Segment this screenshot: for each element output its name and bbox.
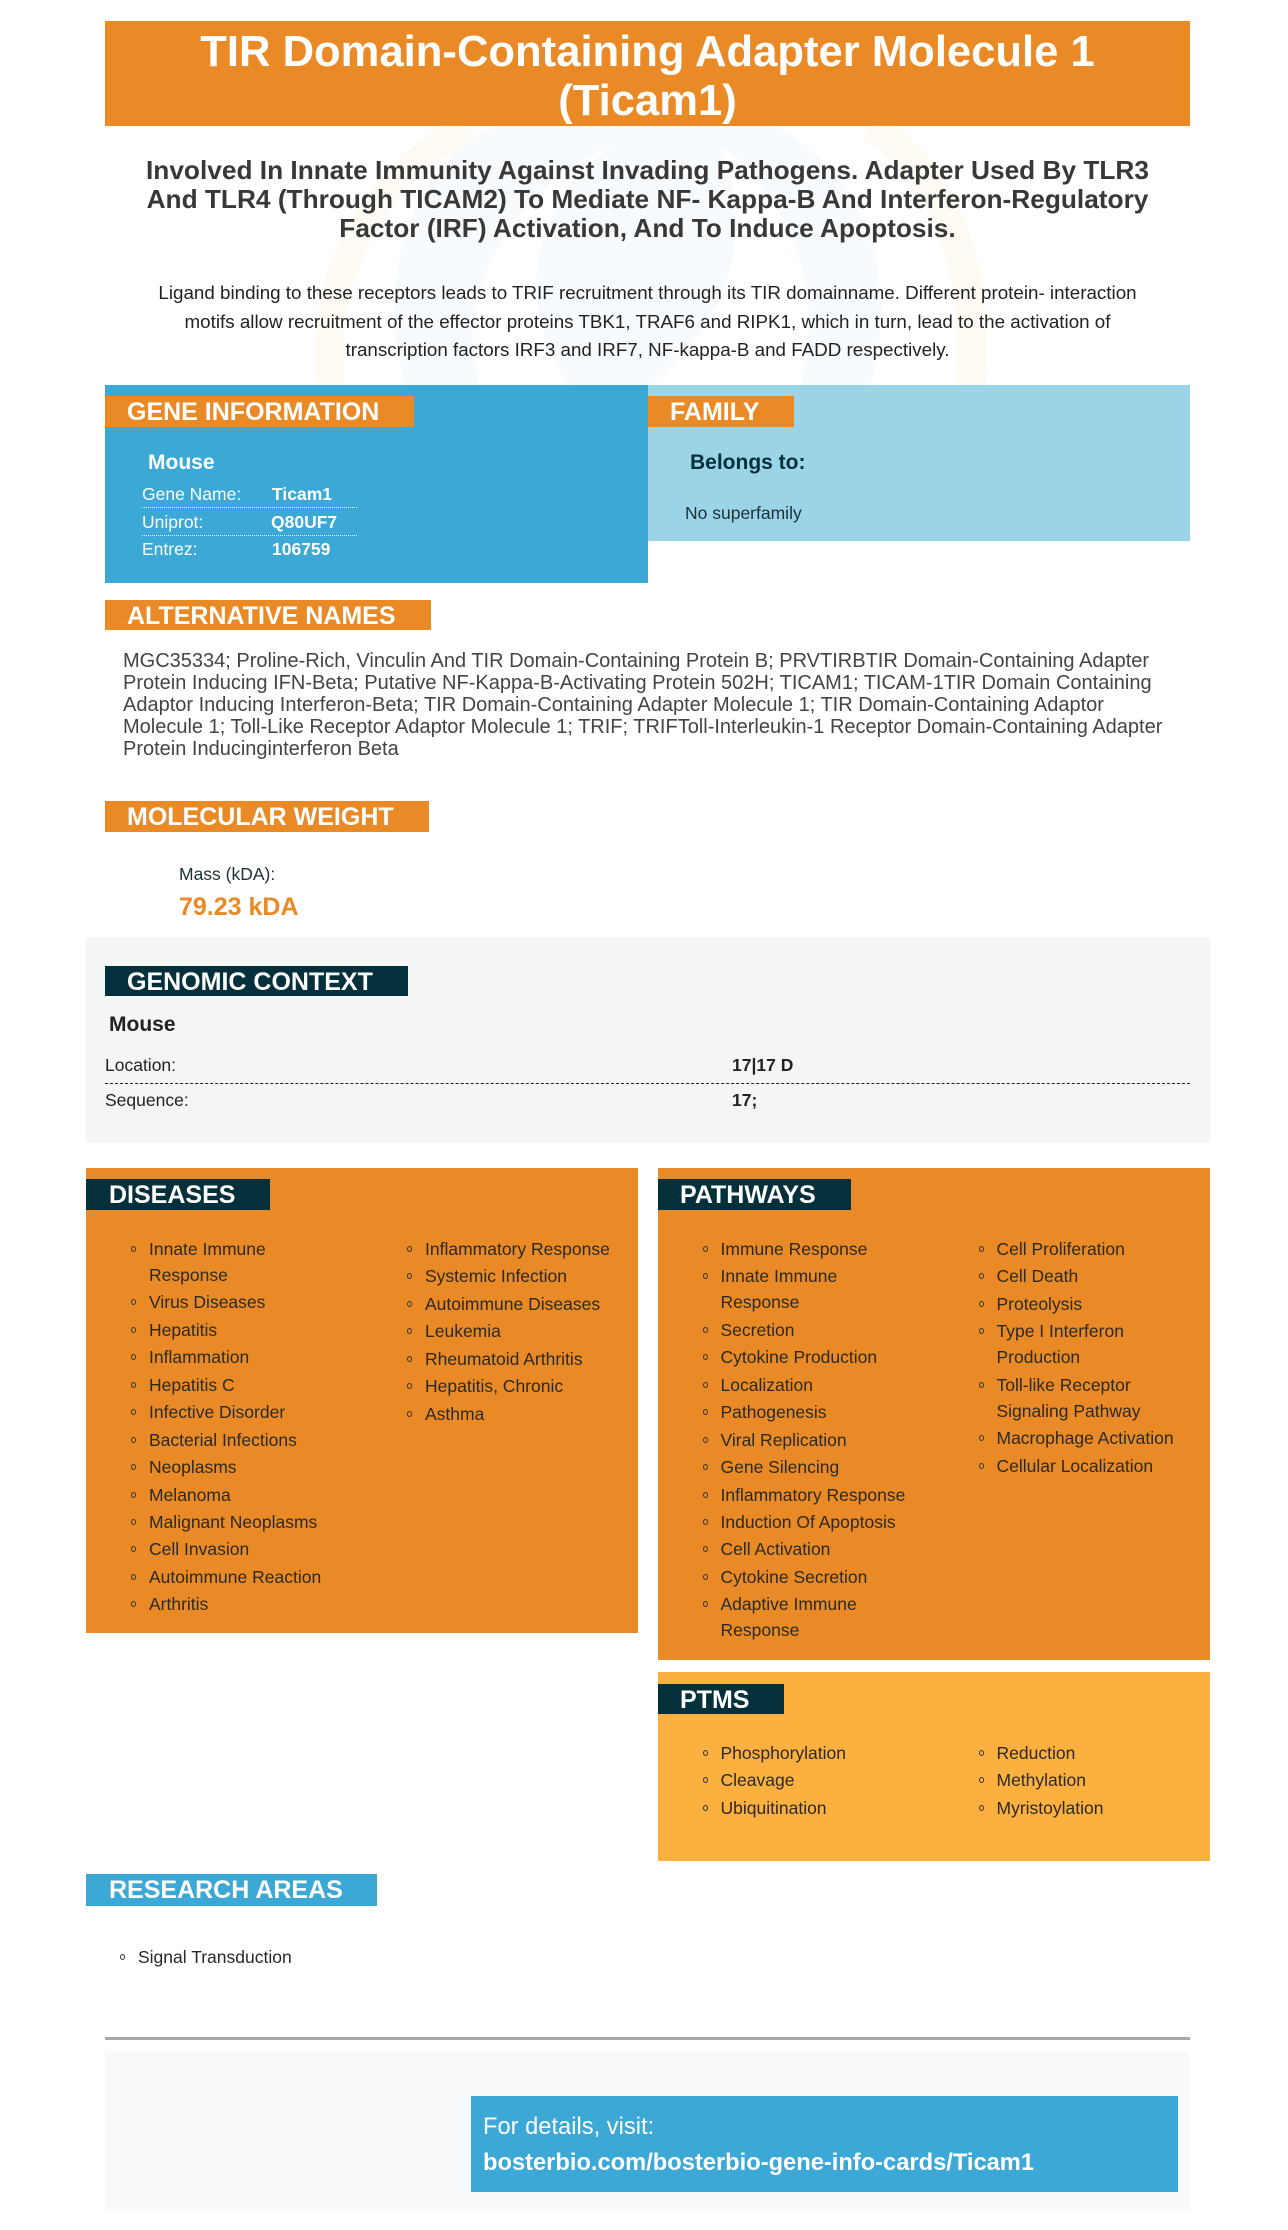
- location row: [105, 1055, 793, 1075]
- diseases list column 2: Rheumatoid Arthritis: [425, 1349, 583, 1369]
- pathways list column 2: [979, 1239, 1174, 1476]
- heading: gene information: GENE INFORMATION: [127, 398, 379, 426]
- heading: family: FAMILY: [670, 398, 759, 426]
- subtitle: And TLR4 (Through TICAM2) To Mediate NF- Kappa-B And Interferon-Regulatory: [147, 184, 1148, 214]
- diseases list column 1: Infective Disorder: [149, 1402, 285, 1422]
- heading: genomic context: GENOMIC CONTEXT: [127, 968, 373, 996]
- ptms list column 1: Ubiquitination: [720, 1798, 827, 1818]
- title banner: [105, 21, 1190, 126]
- pathways list column 1: Response: [720, 1620, 799, 1640]
- description paragraph: transcription factors IRF3 and IRF7, NF-kappa-B and FADD respectively.: [345, 339, 950, 360]
- diseases list column 1: Cell Invasion: [149, 1539, 249, 1559]
- ptms list column 2: Myristoylation: [996, 1798, 1103, 1818]
- panel: genomic context: [86, 937, 1210, 1143]
- pathways list column 1: Immune Response: [720, 1239, 867, 1259]
- alternative names text: Protein Inducinginterferon Beta: [123, 738, 399, 760]
- gene table: Q80UF7: [271, 512, 337, 532]
- alternative names text: Protein Inducing IFN-Beta; Putative NF-Kappa-B-Activating Protein 502H; TICAM1; TICAM-1TIR Domain Containing: [123, 672, 1152, 694]
- pathways list column 1: Secretion: [720, 1320, 794, 1340]
- diseases list column 1: Response: [149, 1265, 228, 1285]
- sequence row: 17;: [732, 1090, 757, 1110]
- description paragraph: motifs allow recruitment of the effector proteins TBK1, TRAF6 and RIPK1, which in turn, lead to the activation of: [185, 311, 1110, 332]
- pathways list column 2: Toll-like Receptor: [996, 1375, 1131, 1395]
- diseases list column 1: Virus Diseases: [149, 1292, 265, 1312]
- sequence row: [105, 1083, 1190, 1116]
- subtitle: Factor (IRF) Activation, And To Induce Apoptosis.: [339, 213, 956, 243]
- alternative names text: Adaptor Inducing Interferon-Beta; TIR Domain-Containing Adapter Molecule 1; TIR Domain-Containing Adaptor: [123, 694, 1104, 716]
- pathways list column 1: Pathogenesis: [720, 1402, 827, 1422]
- subtitle: Involved In Innate Immunity Against Invading Pathogens. Adapter Used By TLR3: [146, 155, 1149, 185]
- pathways list column 2: Cellular Localization: [996, 1456, 1153, 1476]
- species label: Mouse: [109, 1013, 176, 1036]
- heading: ptms: [658, 1684, 784, 1714]
- pathways list column 2: Macrophage Activation: [996, 1428, 1174, 1448]
- superfamily value: No superfamily: [685, 503, 802, 523]
- heading: alternative names: ALTERNATIVE NAMES: [127, 602, 396, 630]
- sequence row: Sequence:: [105, 1090, 189, 1110]
- alternative names text: Molecule 1; Toll-Like Receptor Adaptor Molecule 1; TRIF; TRIFToll-Interleukin-1 Receptor Domain-Containing Adapter: [123, 716, 1162, 738]
- gene table: 106759: [272, 539, 330, 559]
- description paragraph: [158, 282, 1137, 360]
- panel: ptms: [658, 1672, 1210, 1861]
- ptms list column 2: [979, 1743, 1103, 1818]
- heading: diseases: [86, 1179, 270, 1210]
- gene table: Uniprot:: [142, 512, 203, 532]
- diseases list column 1: Hepatitis: [149, 1320, 217, 1340]
- pathways list column 1: Inflammatory Response: [720, 1484, 905, 1504]
- pathways list column 1: Cytokine Production: [720, 1347, 877, 1367]
- diseases list column 2: Hepatitis, Chronic: [425, 1376, 563, 1396]
- pathways list column 2: Production: [996, 1347, 1080, 1367]
- description paragraph: Ligand binding to these receptors leads to TRIF recruitment through its TIR domainname. Different protein- interaction: [158, 282, 1137, 303]
- pathways list column 1: Cell Activation: [720, 1539, 830, 1559]
- gene table: [142, 484, 357, 559]
- diseases list column 2: [407, 1239, 610, 1424]
- panel: pathways: [658, 1168, 1210, 1660]
- mass value: 79.23 kDA: [179, 893, 299, 921]
- pathways list column 1: Induction Of Apoptosis: [720, 1512, 896, 1532]
- diseases list column 1: Bacterial Infections: [149, 1430, 297, 1450]
- ptms list column 1: Cleavage: [720, 1770, 794, 1790]
- diseases list column 2: Leukemia: [425, 1321, 501, 1341]
- ptms list column 1: [703, 1743, 846, 1818]
- pathways list column 2: Type I Interferon: [996, 1321, 1124, 1341]
- diseases list column 2: Systemic Infection: [425, 1266, 567, 1286]
- species label: Mouse: [148, 451, 215, 474]
- subtitle: [146, 155, 1149, 243]
- diseases list column 2: Autoimmune Diseases: [425, 1294, 600, 1314]
- callout: details link: bosterbio.com/bosterbio-gene-info-cards/Ticam1: [483, 2150, 1034, 2176]
- panel: gene information: [105, 385, 648, 583]
- title banner: TIR Domain-Containing Adapter Molecule 1: [200, 28, 1095, 76]
- diseases list column 1: Malignant Neoplasms: [149, 1512, 317, 1532]
- diseases list column 1: Hepatitis C: [149, 1375, 235, 1395]
- location row: 17|17 D: [732, 1055, 793, 1075]
- heading: pathways: [658, 1179, 851, 1210]
- heading: molecular weight: MOLECULAR WEIGHT: [127, 803, 394, 831]
- pathways list column 1: Cytokine Secretion: [720, 1567, 867, 1587]
- footer divider: [105, 2037, 1190, 2040]
- pathways list column 1: Localization: [720, 1375, 813, 1395]
- ptms list column 2: Reduction: [996, 1743, 1075, 1763]
- diseases list column 1: Innate Immune: [149, 1239, 266, 1259]
- diseases list column 1: Neoplasms: [149, 1457, 237, 1477]
- pathways list column 1: Innate Immune: [720, 1266, 837, 1286]
- pathways list column 2: Proteolysis: [996, 1294, 1082, 1314]
- ptms list column 2: Methylation: [996, 1770, 1086, 1790]
- pathways list column 1: Gene Silencing: [720, 1457, 839, 1477]
- research areas list: Signal Transduction: [138, 1947, 292, 1967]
- panel: footer: [105, 2052, 1190, 2211]
- pathways list column 1: [703, 1239, 905, 1640]
- panel: diseases: [86, 1168, 638, 1633]
- pathways list column 1: Response: [720, 1292, 799, 1312]
- gene table: Gene Name:: [142, 484, 241, 504]
- alternative names text: MGC35334; Proline-Rich, Vinculin And TIR Domain-Containing Protein B; PRVTIRBTIR Domain-Containing Adapter: [123, 650, 1149, 672]
- callout: details link: [471, 2096, 1178, 2192]
- diseases list column 1: Autoimmune Reaction: [149, 1567, 321, 1587]
- callout: details link: For details, visit:: [483, 2114, 654, 2140]
- diseases list column 1: [131, 1239, 321, 1614]
- diseases list column 2: Asthma: [425, 1404, 484, 1424]
- belongs to label: Belongs to:: [690, 451, 806, 474]
- heading: diseases: DISEASES: [109, 1181, 235, 1209]
- diseases list column 1: Melanoma: [149, 1484, 231, 1504]
- ptms list column 1: Phosphorylation: [720, 1743, 846, 1763]
- pathways list column 1: Adaptive Immune: [720, 1594, 857, 1614]
- pathways list column 2: Cell Proliferation: [996, 1239, 1125, 1259]
- location row: Location:: [105, 1055, 176, 1075]
- pathways list column 2: Signaling Pathway: [996, 1401, 1140, 1421]
- alternative names text: [123, 650, 1162, 760]
- heading: research areas: RESEARCH AREAS: [109, 1876, 343, 1904]
- heading: family: [648, 396, 794, 427]
- pathways list column 1: Viral Replication: [720, 1430, 847, 1450]
- diseases list column 1: Arthritis: [149, 1594, 208, 1614]
- panel: family: [648, 385, 1190, 541]
- pathways list column 2: Cell Death: [996, 1266, 1078, 1286]
- heading: pathways: PATHWAYS: [680, 1181, 816, 1209]
- title banner: (Ticam1): [558, 77, 737, 125]
- gene table: Ticam1: [272, 484, 332, 504]
- heading: ptms: PTMS: [680, 1686, 749, 1714]
- decorative watermark logo: [315, 126, 987, 385]
- mass label: Mass (kDA):: [179, 864, 275, 884]
- gene table: Entrez:: [142, 539, 197, 559]
- diseases list column 2: Inflammatory Response: [425, 1239, 610, 1259]
- diseases list column 1: Inflammation: [149, 1347, 249, 1367]
